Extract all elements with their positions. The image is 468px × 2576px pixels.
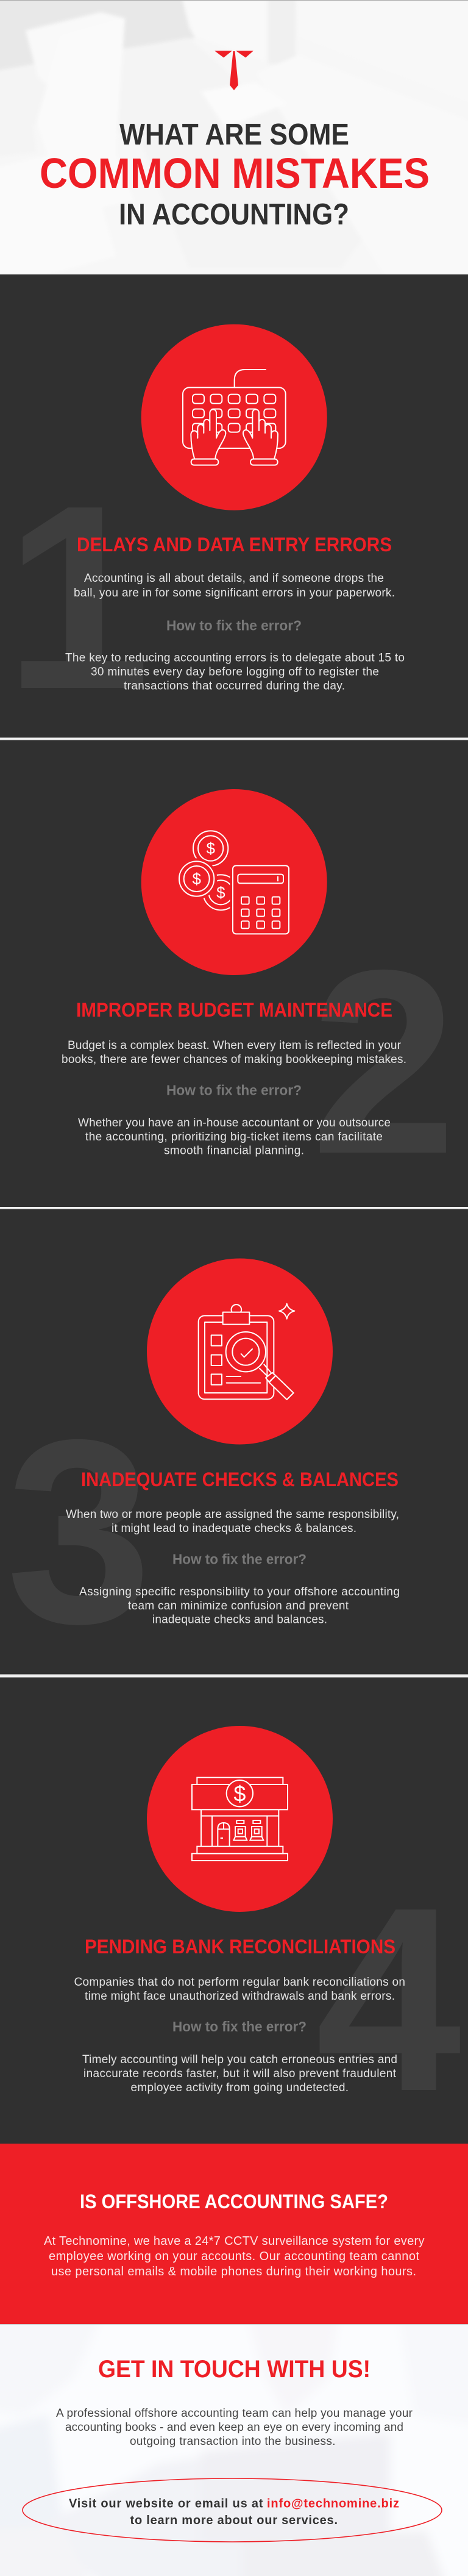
panel: pending bank reconciliations — [0, 1677, 468, 2146]
body text: A professional offshore accounting team can help you manage your — [56, 2407, 413, 2420]
fix description: inadequate checks and balances. — [152, 1614, 327, 1626]
problem description: When two or more people are assigned the same responsibility, — [66, 1508, 399, 1521]
problem description — [62, 1039, 406, 1066]
problem description: books, there are fewer chances of making bookkeeping mistakes. — [62, 1053, 406, 1066]
heading: INADEQUATE CHECKS & BALANCES — [81, 1469, 399, 1490]
fix description: the accounting, prioritizing big-ticket items can facilitate — [85, 1131, 383, 1143]
large number 4: 4 — [316, 1853, 463, 2146]
fix description: Whether you have an in-house accountant or you outsource — [78, 1117, 391, 1129]
fix subheading: How to fix the error? — [172, 2019, 307, 2034]
large number 2: 2 — [311, 916, 456, 1209]
fix description: Timely accounting will help you catch erroneous entries and — [82, 2053, 397, 2066]
body text: At Technomine, we have a 24*7 CCTV surveillance system for every — [44, 2234, 424, 2248]
fix description — [78, 1117, 391, 1157]
fix subheading: How to fix the error? — [166, 617, 302, 633]
panel: delays and data entry errors — [0, 274, 468, 744]
panel: get in touch — [0, 2299, 468, 2576]
heading: PENDING BANK RECONCILIATIONS — [85, 1936, 395, 1958]
icon circle: bank building: $ — [233, 1781, 246, 1806]
fix description — [65, 652, 405, 693]
fix description: Assigning specific responsibility to your offshore accounting — [79, 1586, 400, 1598]
problem description: Budget is a complex beast. When every item is reflected in your — [68, 1039, 402, 1052]
heading: IMPROPER BUDGET MAINTENANCE — [76, 999, 392, 1021]
fix description: The key to reducing accounting errors is to delegate about 15 to — [65, 652, 405, 665]
fix description: 30 minutes every day before logging off to register the — [91, 666, 379, 679]
contact photo background — [0, 2420, 440, 2576]
callout ellipse with contact details: Visit our website or email us at — [69, 2497, 263, 2511]
panel: inadequate checks and balances — [0, 1209, 468, 1678]
fix description: team can minimize confusion and prevent — [128, 1600, 349, 1612]
body text: outgoing transaction into the business. — [130, 2435, 335, 2448]
panel: improper budget maintenance — [0, 740, 468, 1209]
icon circle: keyboard and typing hands — [141, 324, 327, 510]
large number 1: 1 — [5, 451, 151, 744]
heading: DELAYS AND DATA ENTRY ERRORS — [77, 534, 392, 556]
fix description — [82, 2053, 397, 2094]
icon circle: coins and calculator: $ — [216, 884, 225, 902]
problem description — [74, 1976, 405, 2003]
icon circle: bank building — [147, 1726, 333, 1912]
callout ellipse with contact details — [23, 2478, 442, 2542]
body text — [44, 2234, 424, 2278]
body text — [56, 2407, 413, 2448]
logo: red necktie T — [214, 51, 254, 90]
main title: IN ACCOUNTING? — [119, 198, 349, 231]
panel: is offshore accounting safe — [0, 2144, 468, 2324]
problem description — [74, 572, 395, 599]
main title — [40, 118, 430, 231]
icon circle: coins and calculator: $ — [206, 839, 215, 857]
problem description: time might face unauthorized withdrawals and bank errors. — [85, 1990, 395, 2003]
fix description: inaccurate records faster, but it will also prevent fraudulent — [83, 2067, 397, 2080]
fix subheading: How to fix the error? — [166, 1082, 302, 1098]
problem description: Companies that do not perform regular bank reconciliations on — [74, 1976, 405, 1989]
fix description: smooth financial planning. — [164, 1145, 304, 1157]
heading: IS OFFSHORE ACCOUNTING SAFE? — [80, 2191, 388, 2213]
body text: accounting books - and even keep an eye on every incoming and — [65, 2421, 403, 2434]
fix description: transactions that occurred during the day. — [124, 680, 345, 693]
icon circle: coins and calculator: $ — [192, 870, 201, 888]
header photo background — [0, 0, 468, 293]
problem description — [66, 1508, 399, 1535]
callout ellipse with contact details: to learn more about our services. — [130, 2514, 338, 2527]
main title: WHAT ARE SOME — [119, 118, 349, 151]
fix subheading: How to fix the error? — [172, 1551, 307, 1567]
main title: COMMON MISTAKES — [40, 149, 430, 197]
body text: employee working on your accounts. Our accounting team cannot — [49, 2250, 419, 2263]
callout ellipse with contact details: info@technomine.biz — [267, 2497, 399, 2511]
body text: use personal emails & mobile phones during their working hours. — [51, 2265, 416, 2278]
large number 3: 3 — [6, 1386, 152, 1678]
icon circle: clipboard and magnifier — [147, 1259, 333, 1444]
fix description — [79, 1586, 400, 1626]
problem description: ball, you are in for some significant errors in your paperwork. — [74, 587, 395, 599]
fix description: employee activity from going undetected. — [130, 2081, 349, 2094]
icon circle: coins and calculator — [141, 789, 327, 975]
heading: GET IN TOUCH WITH US! — [98, 2356, 370, 2383]
problem description: Accounting is all about details, and if someone drops the — [84, 572, 384, 585]
header panel — [0, 0, 468, 293]
problem description: it might lead to inadequate checks & balances. — [112, 1522, 356, 1535]
